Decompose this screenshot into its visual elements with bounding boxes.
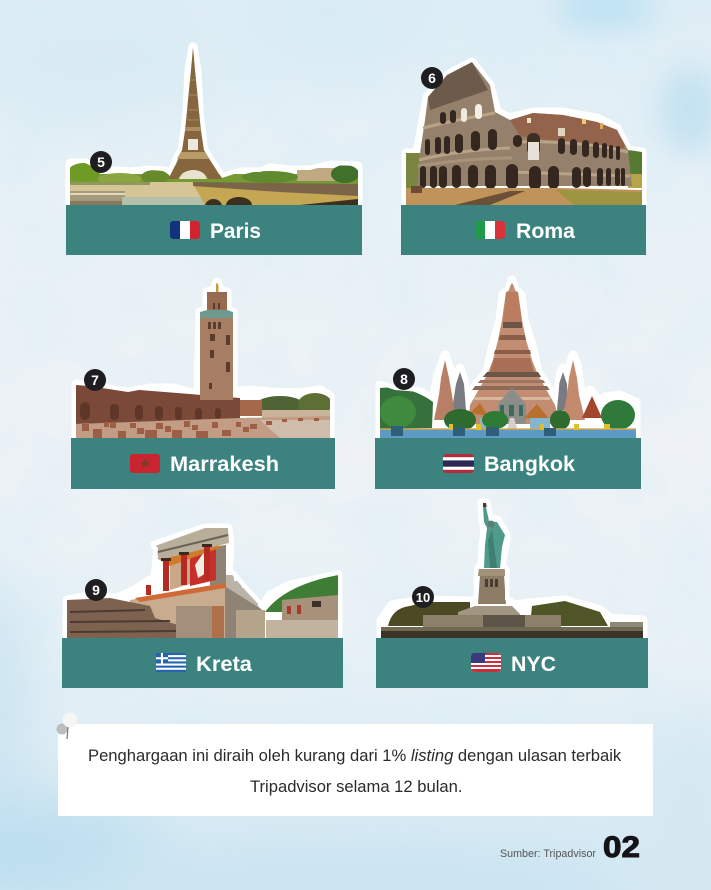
- label bar: [375, 438, 641, 489]
- note text: Penghargaan ini diraih oleh kurang dari 1% listing dengan ulasan terbaik: [88, 746, 621, 765]
- note panel: [58, 724, 653, 816]
- flag: USA: [471, 653, 501, 672]
- panel: Marrakesh: [71, 282, 335, 489]
- page number: 02: [603, 831, 640, 864]
- number badge: [421, 67, 443, 89]
- city name: NYC: [511, 653, 556, 676]
- photo: Eiffel Tower sticker: [68, 47, 359, 205]
- label bar: [376, 638, 648, 688]
- label bar: [66, 205, 362, 255]
- number badge: 5: [97, 154, 105, 170]
- city name: Roma: [516, 220, 575, 243]
- number badge: [90, 151, 112, 173]
- panel: Paris: [66, 47, 362, 255]
- panel: NYC: [376, 503, 648, 688]
- icon: push pin: [56, 712, 78, 739]
- source note: Sumber: Tripadvisor: [500, 848, 596, 860]
- photo: Statue of Liberty sticker: [381, 503, 643, 638]
- number badge: [85, 579, 107, 601]
- number badge: [412, 586, 434, 608]
- label bar: [401, 205, 646, 255]
- flag: Morocco: [130, 454, 160, 473]
- label bar: [71, 438, 335, 489]
- photo: Knossos Palace sticker: [67, 528, 338, 638]
- note text: Tripadvisor selama 12 bulan.: [250, 777, 462, 796]
- number badge: 7: [91, 372, 99, 388]
- photo: Wat Arun sticker: [380, 280, 636, 438]
- label bar: [62, 638, 343, 688]
- number badge: 8: [400, 371, 408, 387]
- number badge: 10: [416, 590, 430, 605]
- flag: Greece: [156, 653, 186, 672]
- flag: France: [170, 221, 200, 239]
- number badge: [393, 368, 415, 390]
- flag: Italy: [475, 221, 505, 239]
- flag: Thailand: [443, 454, 474, 473]
- city name: Paris: [210, 220, 261, 243]
- city name: Bangkok: [484, 453, 575, 476]
- number badge: [84, 369, 106, 391]
- panel: Bangkok: [375, 280, 641, 489]
- number badge: 6: [428, 70, 436, 86]
- number badge: 9: [92, 582, 100, 598]
- city name: Kreta: [196, 653, 252, 676]
- photo: Koutoubia Mosque sticker: [76, 282, 332, 438]
- photo: Colosseum sticker: [406, 62, 642, 205]
- panel: Kreta: [62, 528, 343, 688]
- panel: Roma: [401, 62, 646, 255]
- city name: Marrakesh: [170, 453, 279, 476]
